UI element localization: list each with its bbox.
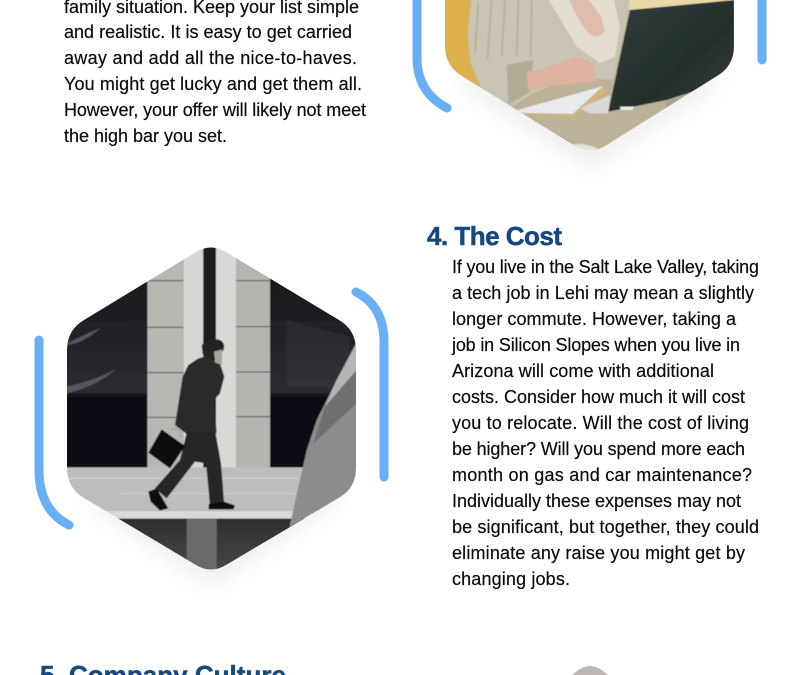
text block: intro paragraph ending: However, your offer will likely not meet	[64, 100, 366, 120]
text block: intro paragraph ending: the high bar you set.	[64, 126, 227, 146]
blue arc left	[417, 0, 447, 108]
man	[175, 356, 224, 434]
photo panel: next hexagon top (cut off at page edge)	[546, 666, 634, 675]
text block: the cost paragraph: changing jobs.	[452, 569, 570, 589]
text block: the cost paragraph: month on gas and car maintenance?	[452, 465, 752, 485]
text block: the cost paragraph: be higher? Will you spend more each	[452, 439, 745, 459]
hexagon shadow	[465, 40, 715, 170]
photo	[445, 0, 734, 150]
text block: intro paragraph ending: and realistic. It is easy to get carried	[64, 22, 352, 42]
text block: intro paragraph ending: away and add all the nice-to-haves.	[64, 48, 357, 68]
text block: the cost paragraph: If you live in the Salt Lake Valley, taking	[452, 257, 759, 277]
text block: the cost paragraph: you to relocate. Will the cost of living	[452, 413, 749, 433]
text block: the cost paragraph: costs. Consider how much it will cost	[452, 387, 745, 407]
photo panel: woman with laptop in hexagon	[417, 0, 762, 170]
text block: intro paragraph ending	[64, 0, 366, 146]
text block: the cost paragraph: job in Silicon Slopes when you live in	[451, 335, 740, 355]
blue arc right	[356, 292, 384, 477]
text block: the cost paragraph: Arizona will come with additional	[452, 361, 714, 381]
text block: the cost paragraph	[451, 257, 759, 589]
text block: the cost paragraph: Individually these expenses may not	[452, 491, 741, 511]
text block: the cost paragraph: a tech job in Lehi may mean a slightly	[452, 283, 754, 303]
text block: the cost paragraph: longer commute. However, taking a	[452, 309, 737, 329]
photo	[63, 243, 360, 577]
blue bar right	[758, 0, 766, 60]
heading: 4. The Cost: 4. The Cost	[427, 221, 562, 251]
photo panel: businessman walking in hexagon	[39, 243, 384, 588]
text block: the cost paragraph: be significant, but together, they could	[452, 517, 759, 537]
text block: intro paragraph ending: You might get lucky and get them all.	[64, 74, 362, 94]
hexagon shadow	[90, 400, 335, 588]
text block: the cost paragraph: eliminate any raise you might get by	[452, 543, 745, 563]
blue arc left	[39, 340, 69, 525]
